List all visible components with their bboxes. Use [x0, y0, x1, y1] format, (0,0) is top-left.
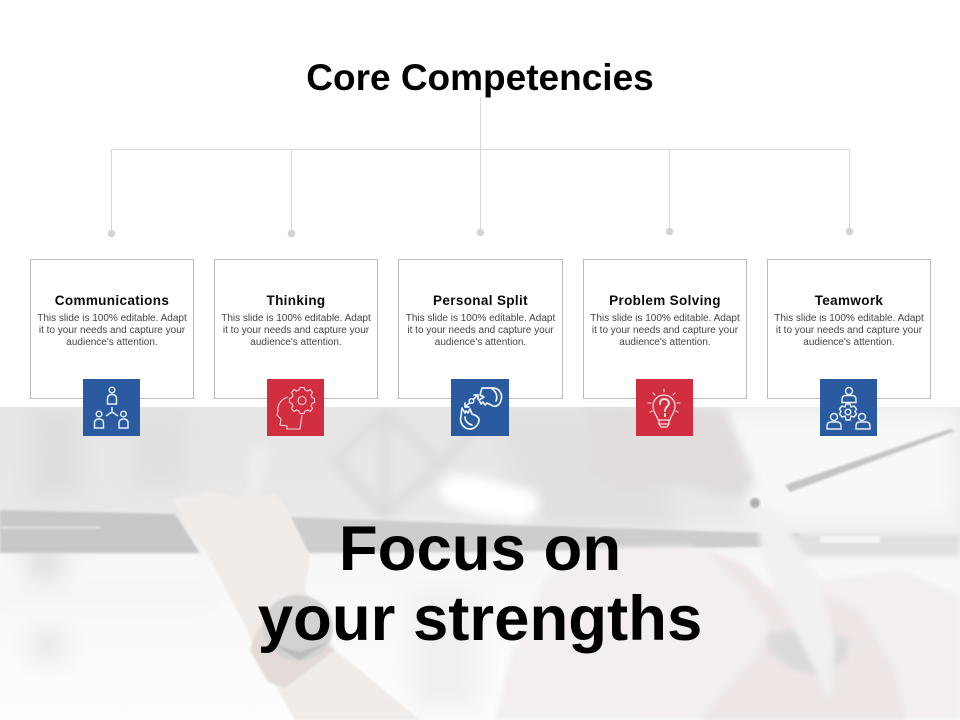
body text: Problem Solving: it to your needs and capture your: [592, 325, 738, 336]
hand and forearm: [173, 491, 420, 720]
cable at right: [785, 429, 955, 492]
body text: Personal Split: audience's attention.: [435, 337, 526, 348]
heading: Thinking: Thinking: [266, 293, 326, 308]
body text: Personal Split: [406, 313, 556, 348]
card: Teamwork: [767, 259, 931, 399]
heading: Teamwork: Teamwork: [815, 293, 883, 308]
headline: Focus on: [339, 514, 621, 584]
body text: Communications: it to your needs and capture your: [39, 325, 185, 336]
card: Communications: [30, 259, 194, 399]
body text: Personal Split: This slide is 100% editable. Adapt: [406, 313, 555, 324]
icon: question mark light bulb: [636, 379, 693, 436]
headline: your strengths: [258, 584, 702, 654]
card: Thinking: [214, 259, 378, 399]
card: Problem Solving: [583, 259, 747, 399]
body text: Thinking: This slide is 100% editable. Adapt: [221, 313, 371, 324]
body text: Teamwork: [774, 313, 924, 348]
body text: Teamwork: This slide is 100% editable. Adapt: [774, 313, 924, 324]
body text: Thinking: it to your needs and capture your: [223, 325, 369, 336]
body text: Problem Solving: This slide is 100% editable. Adapt: [590, 313, 740, 324]
icon: head with gear: [267, 379, 324, 436]
body text: Problem Solving: [590, 313, 740, 348]
body text: Teamwork: it to your needs and capture your: [776, 325, 922, 336]
body text: Thinking: audience's attention.: [250, 337, 342, 348]
headline: [258, 514, 702, 654]
ponytail: [758, 532, 836, 688]
card: Personal Split: [398, 259, 563, 399]
body text: Communications: [37, 313, 187, 348]
body text: Communications: This slide is 100% editable. Adapt: [37, 313, 187, 324]
heading: Communications: Communications: [55, 293, 169, 308]
icon: communications network: [83, 379, 140, 436]
body text: Teamwork: audience's attention.: [803, 337, 895, 348]
icon: personal split hands: [451, 379, 509, 436]
title: Core Competencies: [306, 57, 654, 98]
body text: Thinking: [221, 313, 371, 348]
body text: Problem Solving: audience's attention.: [619, 337, 711, 348]
heading: Personal Split: Personal Split: [433, 293, 528, 308]
connector tree: [108, 97, 854, 238]
body text: Personal Split: it to your needs and capture your: [407, 325, 554, 336]
white glove highlight: [437, 475, 540, 520]
hair on head: [656, 407, 756, 498]
hand stem highlight: [245, 445, 272, 500]
background photo: weightlifter with barbell: [0, 407, 960, 720]
barbell: [0, 510, 960, 556]
body text: Communications: audience's attention.: [66, 337, 158, 348]
icon: teamwork gear: [820, 379, 877, 436]
heading: Problem Solving: Problem Solving: [609, 293, 721, 308]
back and shoulders: [495, 546, 960, 720]
